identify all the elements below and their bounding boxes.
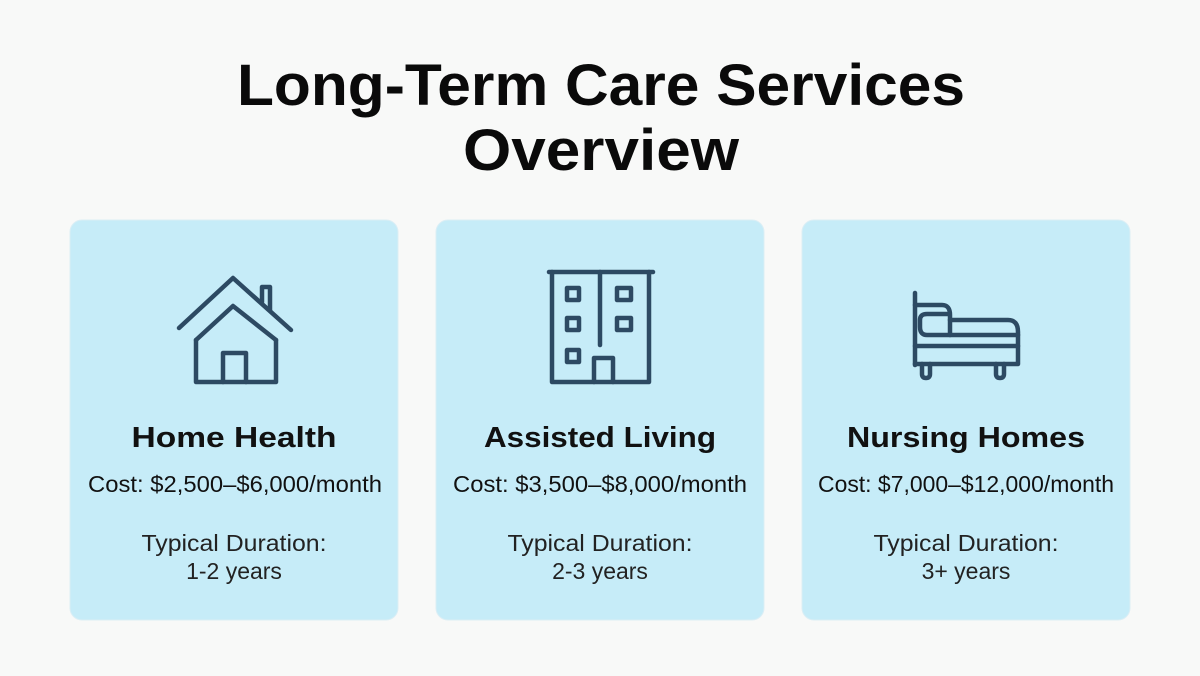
icon: building [549, 272, 653, 382]
cost: Cost: $7,000–$12,000/month [818, 471, 1114, 497]
heading: Nursing Homes [847, 422, 1085, 454]
duration: Typical Duration: [142, 530, 326, 556]
icon: bed [915, 293, 1018, 378]
panel: home health [70, 220, 398, 620]
cost: Cost: $2,500–$6,000/month [88, 471, 382, 497]
panel: nursing homes: 3+ years [922, 558, 1010, 584]
title [237, 53, 965, 183]
panel: assisted living [436, 220, 764, 620]
heading: Assisted Living [484, 422, 716, 454]
panel: nursing homes [802, 220, 1130, 620]
cost: Cost: $3,500–$8,000/month [453, 471, 747, 497]
panel: home health: 1-2 years [186, 558, 282, 584]
icon: house [179, 278, 291, 382]
duration: Typical Duration: [508, 530, 692, 556]
duration: Typical Duration: [874, 530, 1058, 556]
title: Overview [463, 118, 740, 183]
heading: Home Health [132, 422, 336, 454]
panel: assisted living: 2-3 years [552, 558, 648, 584]
title: Long-Term Care Services [237, 53, 965, 118]
